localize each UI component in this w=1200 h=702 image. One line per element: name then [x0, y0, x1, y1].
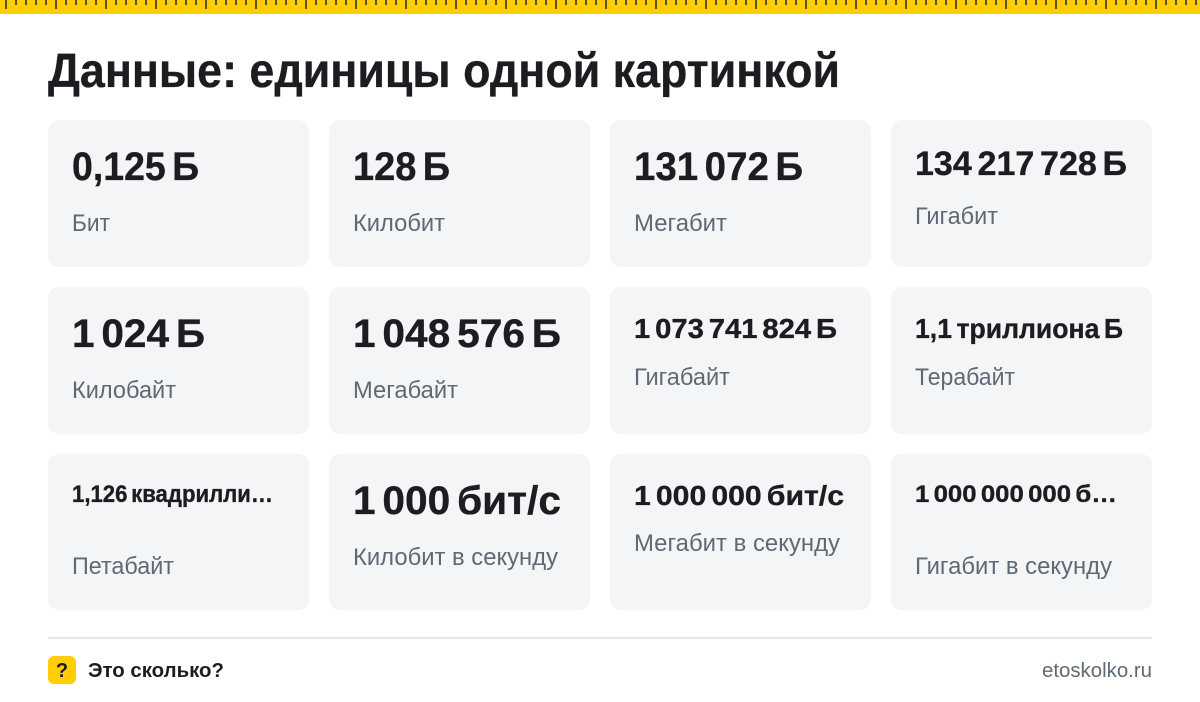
icon: question badge: [48, 656, 76, 684]
card: kilobit: 128 Б: [353, 145, 450, 189]
card: petabyte: 1,126 квадрилли…: [72, 481, 273, 508]
card: gigabyte: [610, 287, 871, 434]
card: kilobit: Килобит: [353, 210, 445, 237]
card: kilobyte: Килобайт: [72, 377, 176, 404]
card: megabyte: [329, 287, 590, 434]
card: petabyte: Петабайт: [72, 553, 174, 580]
card: bit: Бит: [72, 210, 110, 237]
card: terabyte: [891, 287, 1152, 434]
card: gigabit per second: 1 000 000 000 б…: [915, 481, 1117, 508]
card: kilobit per second: 1 000 бит/с: [353, 479, 561, 523]
ruler strip: [0, 0, 1200, 14]
card: megabit per second: [610, 454, 871, 610]
card: kilobit: [329, 120, 590, 267]
card: gigabit: [891, 120, 1152, 267]
card: gigabit per second: [891, 454, 1152, 610]
card: megabyte: 1 048 576 Б: [353, 312, 561, 356]
card: gigabyte: Гигабайт: [634, 364, 730, 391]
card: bit: 0,125 Б: [72, 145, 199, 189]
card: megabit: [610, 120, 871, 267]
card: megabit per second: 1 000 000 бит/с: [634, 480, 844, 511]
card: bit: [48, 120, 309, 267]
card: kilobit per second: [329, 454, 590, 610]
footer brand: Это сколько?: [88, 660, 224, 682]
card: gigabit per second: Гигабит в секунду: [915, 553, 1112, 580]
icon: question badge: ?: [56, 660, 68, 682]
card: megabit: 131 072 Б: [634, 145, 803, 189]
card: gigabit: 134 217 728 Б: [915, 145, 1127, 183]
footer url: etoskolko.ru: [1042, 660, 1152, 682]
card: kilobit per second: Килобит в секунду: [353, 544, 558, 571]
card: petabyte: [48, 454, 309, 610]
card: megabit per second: Мегабит в секунду: [634, 530, 840, 557]
card: megabit: Мегабит: [634, 210, 727, 237]
card: kilobyte: 1 024 Б: [72, 312, 205, 356]
title: Данные: единицы одной картинкой: [48, 45, 840, 98]
card: kilobyte: [48, 287, 309, 434]
card: gigabit: Гигабит: [915, 203, 998, 230]
card: terabyte: Терабайт: [915, 364, 1015, 391]
card: megabyte: Мегабайт: [353, 377, 458, 404]
card: gigabyte: 1 073 741 824 Б: [634, 313, 837, 344]
card: terabyte: 1,1 триллиона Б: [915, 313, 1123, 344]
